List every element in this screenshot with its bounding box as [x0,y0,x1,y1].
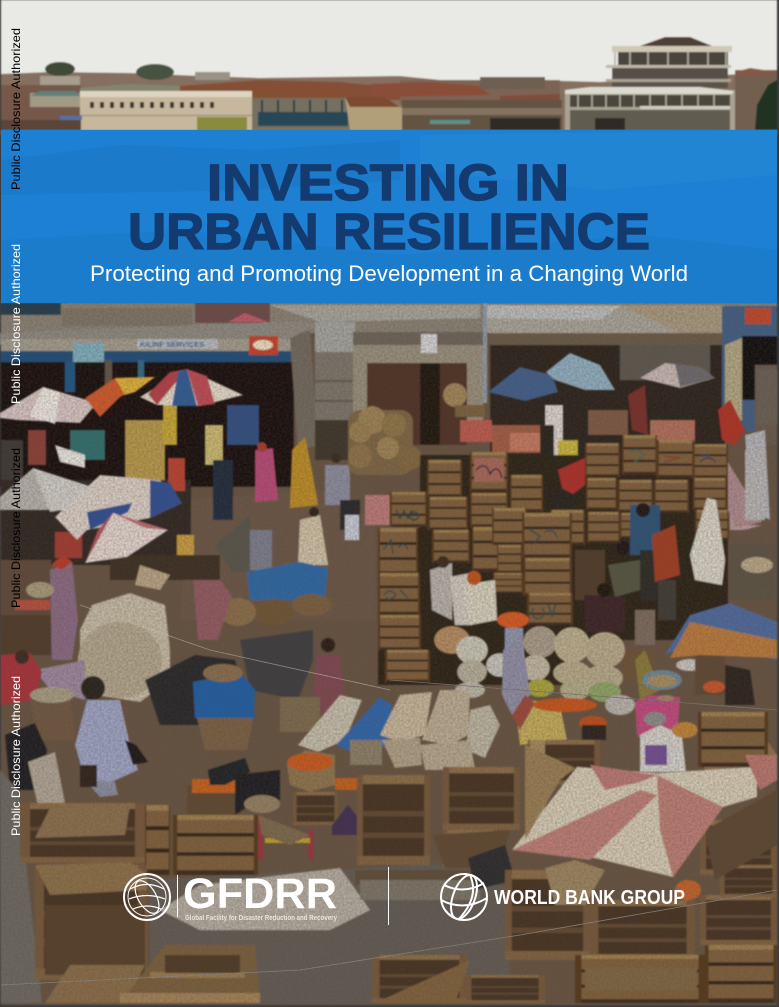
GFDRR logo: Global Facility for Disaster Reduction and Recovery [185,915,337,922]
side stamp 2: Public Disclosure Authorized [9,244,23,404]
blue title band [1,130,777,303]
photo: sacks and produce [298,603,777,772]
side stamp 4: Public Disclosure Authorized [9,676,23,836]
photo: market stalls and shop fronts [0,300,777,1005]
icon: GFDRR globe [124,874,170,920]
title: INVESTING IN [207,154,569,211]
side stamp 1: Public Disclosure Authorized [9,28,23,190]
side stamp 3: Public Disclosure Authorized [9,448,23,608]
GFDRR logo: GFDRR [183,870,337,918]
photo: market stalls and shop fronts: KILINF SERVICES [140,340,204,349]
photo: left crowd of traders [1,405,390,815]
photo: overhead wires [1,605,777,985]
photo: city skyline under hazy sky [1,0,777,135]
World Bank Group logo [441,872,685,922]
photo: stacked wooden crates [348,370,777,698]
icon: World Bank globe [441,872,487,922]
photo: umbrellas [0,353,715,563]
photo: grain and shading overlay [1,303,777,1003]
logo divider [388,867,389,925]
photo: foreground crates and produce [0,712,777,1003]
title: URBAN RESILIENCE [128,203,650,260]
GFDRR logo [124,870,337,922]
subtitle: Protecting and Promoting Development in a Changing World [90,261,688,286]
World Bank Group logo: WORLD BANK GROUP [494,887,685,909]
title [128,154,650,260]
